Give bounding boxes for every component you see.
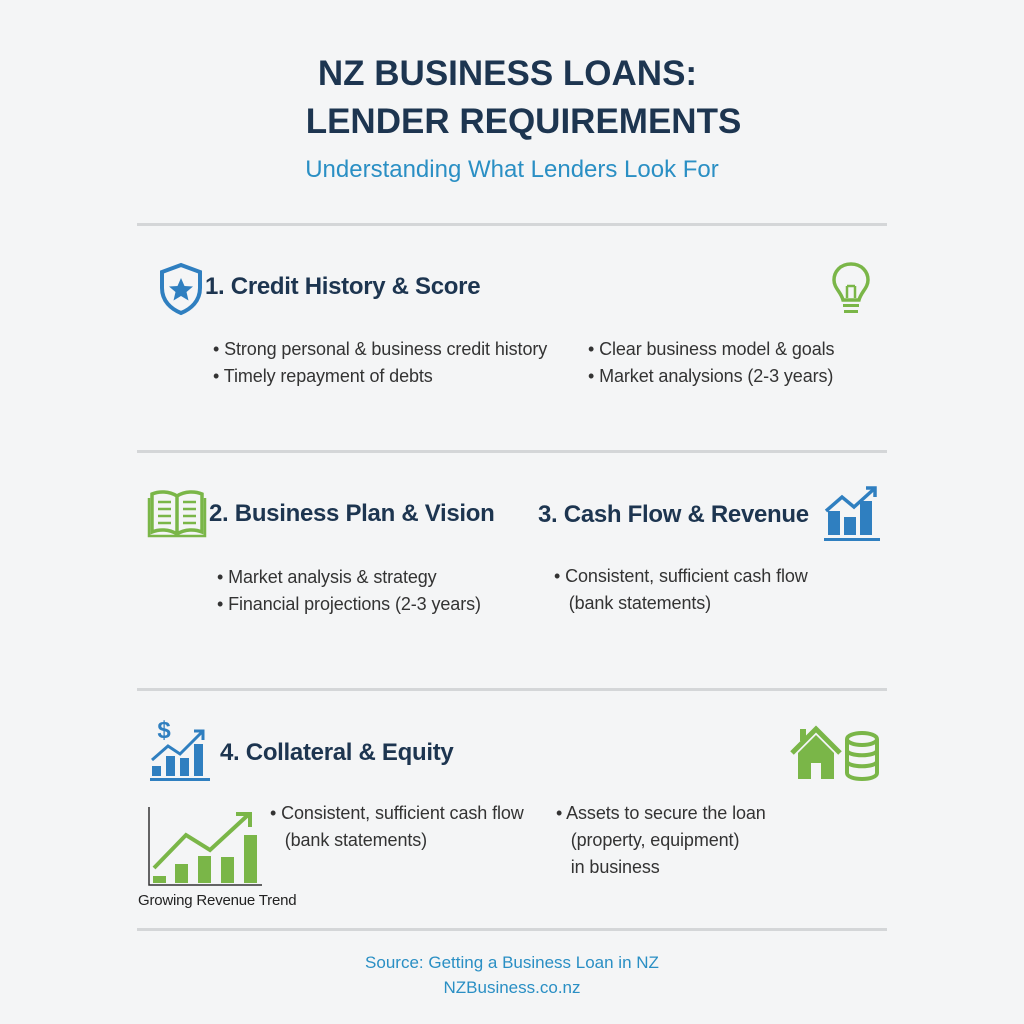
bullets: credit [213, 339, 548, 386]
bullets: cash flow [554, 566, 808, 613]
heading: credit history: 1. Credit History & Score [205, 273, 480, 300]
heading: business plan: 2. Business Plan & Vision [209, 500, 494, 527]
bullets: assets: (property, equipment) [571, 830, 739, 850]
bullets: cash flow: • Consistent, sufficient cash flow [554, 566, 808, 586]
icon: dollar chart [150, 717, 210, 781]
bullets: business plan: • Market analysis & strategy [217, 567, 437, 587]
title: LENDER REQUIREMENTS [306, 102, 741, 141]
icon: dollar chart: $ [157, 717, 171, 744]
bullets: collateral cash flow: • Consistent, sufficient cash flow [270, 803, 524, 823]
footer source: Source: Getting a Business Loan in NZ [365, 953, 659, 972]
chart: growing revenue trend [148, 807, 262, 886]
title: NZ BUSINESS LOANS: [318, 54, 697, 93]
bullets: assets: • Assets to secure the loan [556, 803, 766, 823]
title [306, 54, 741, 141]
bullets: business plan [217, 567, 481, 614]
bullets: collateral cash flow [270, 803, 524, 850]
icon: book [148, 490, 206, 538]
icon: lightbulb [832, 262, 870, 313]
icon: shield star [160, 262, 202, 316]
bullets: plan goals [588, 339, 834, 386]
bullets: assets: in business [571, 857, 660, 877]
bullets: credit: • Timely repayment of debts [213, 366, 433, 386]
bullets: collateral cash flow: (bank statements) [285, 830, 427, 850]
footer source [365, 953, 659, 997]
bullets: credit: • Strong personal & business credit history [213, 339, 547, 359]
icon: bar chart [824, 486, 880, 541]
heading: cash flow: 3. Cash Flow & Revenue [538, 501, 809, 528]
bullets: cash flow: (bank statements) [569, 593, 711, 613]
bullets: assets [556, 803, 766, 877]
subtitle: Understanding What Lenders Look For [305, 156, 719, 183]
bullets: plan goals: • Market analysions (2-3 years) [588, 366, 833, 386]
footer source: NZBusiness.co.nz [444, 978, 580, 997]
bullets: business plan: • Financial projections (2-3 years) [217, 594, 481, 614]
icon: house and coins [790, 726, 879, 781]
bullets: plan goals: • Clear business model & goals [588, 339, 834, 359]
heading: collateral: 4. Collateral & Equity [220, 739, 453, 766]
chart caption: Growing Revenue Trend [138, 892, 296, 909]
